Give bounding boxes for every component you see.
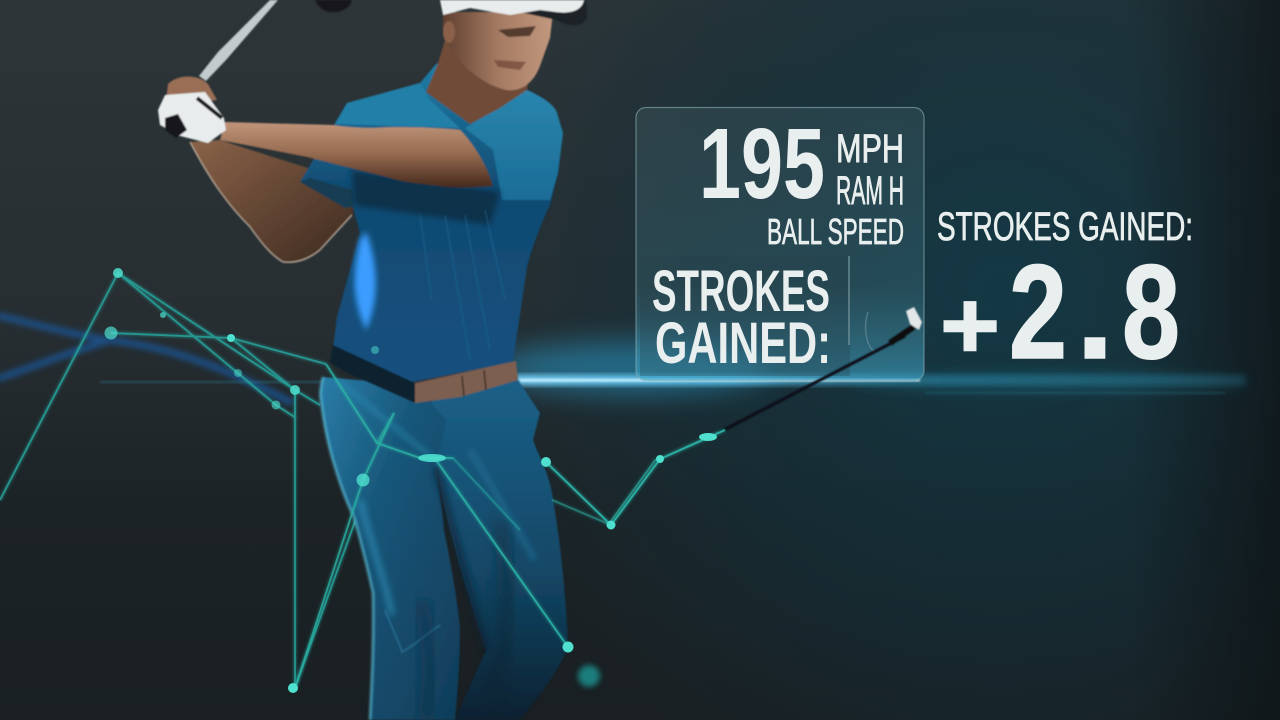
inner strokes-gained sub-panel [640,256,876,376]
stat: +2.8 value [940,238,1180,387]
panel: ball speed glass card [636,108,924,380]
neck and head [426,0,587,124]
stat: +2.8 value: + [940,272,1000,379]
label: strokes gained in card: STROKES [652,259,830,324]
glow streak [100,342,1250,394]
back leg [430,377,568,720]
blue motion ribbon [0,316,290,402]
gloved hands [158,76,226,143]
data lines: left and lower network behind golfer [0,273,394,688]
shirt light flare [355,232,376,330]
stat: +2.8 value: 8 [1122,238,1180,387]
pants [320,377,568,720]
stat: 195 value: 195 [699,108,825,220]
cap [440,0,587,25]
club lower shaft and head [720,307,922,432]
stat unit: RAM H: RAM H [836,169,904,213]
belt [330,345,518,403]
golfer [158,0,922,720]
shirt [300,63,563,382]
label: ball speed: BALL SPEED [767,211,904,252]
stat unit: MPH: MPH [836,127,904,171]
label: strokes gained in card: GAINED: [655,311,831,376]
club shaft raised [199,0,352,81]
data network in front of golfer [295,364,725,688]
front leg [320,377,460,720]
label: strokes gained in card [652,259,831,376]
rear arm [190,140,353,262]
data nodes [104,268,717,693]
stat: +2.8 value: . [1076,238,1114,387]
stat: +2.8 value: 2 [1009,238,1067,387]
lead arm [220,122,493,188]
